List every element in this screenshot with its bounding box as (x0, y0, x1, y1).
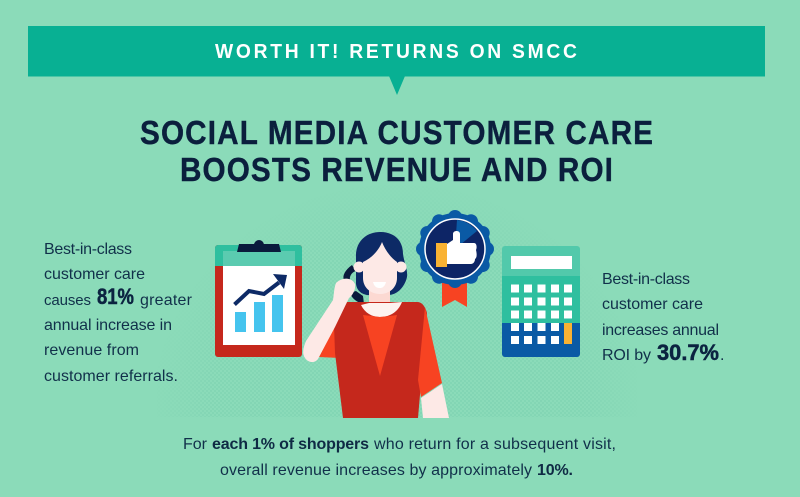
left text block: 81%: 81% (97, 284, 134, 309)
right text block: 30.7%: Best-in-class (602, 271, 690, 288)
bottom statement: who return for a subsequent visit, (373, 436, 616, 453)
right sleeve (418, 307, 442, 397)
face (363, 242, 397, 294)
display (511, 256, 572, 269)
left text block: 81%: Best-in-class (44, 241, 132, 258)
scalloped seal (416, 210, 494, 288)
right text block: 30.7% (602, 271, 724, 365)
collar (361, 302, 402, 317)
neck (369, 288, 390, 314)
trend arrow (234, 274, 287, 304)
left text block: 81%: causes (44, 292, 91, 309)
bottom statement: overall revenue increases by approximately (220, 462, 532, 479)
left text block: 81%: customer care (44, 266, 145, 283)
cuff (436, 243, 447, 267)
icon: calculator (502, 246, 580, 357)
right forearm (421, 384, 449, 418)
smile (373, 282, 386, 288)
bottom statement (183, 436, 616, 479)
ribbon (442, 280, 467, 307)
bottom statement: For (183, 436, 208, 453)
thumb (447, 231, 477, 264)
bottom statement: each 1% of shoppers (212, 436, 369, 453)
phone handset (343, 265, 364, 304)
bars (235, 295, 283, 332)
banner heading: WORTH IT! RETURNS ON SMCC (215, 40, 577, 63)
V-neck panel (363, 315, 397, 376)
keypad (511, 284, 572, 344)
left text block: 81%: customer referrals. (44, 368, 178, 385)
right text block: 30.7%: ROI by (602, 347, 651, 364)
right text block: 30.7%: customer care (602, 296, 703, 313)
torso (334, 302, 427, 418)
stippled ground texture (202, 232, 592, 417)
raised arm and hand (303, 279, 355, 362)
left sleeve (319, 322, 340, 358)
icon: thumbs-up award badge (416, 210, 494, 307)
title (140, 115, 653, 188)
title: BOOSTS REVENUE AND ROI (180, 152, 613, 188)
icon: clipboard with growth chart (215, 240, 302, 357)
left text block: 81% (44, 241, 193, 385)
right text block: 30.7%: 30.7% (657, 340, 719, 365)
left text block: 81%: annual increase in (44, 317, 172, 334)
title: SOCIAL MEDIA CUSTOMER CARE (140, 115, 653, 151)
left text block: 81%: greater (140, 292, 193, 309)
hair (356, 232, 407, 295)
right text block: 30.7%: . (720, 347, 724, 364)
left text block: 81%: revenue from (44, 342, 139, 359)
bottom statement: 10%. (537, 462, 573, 479)
ears (354, 262, 364, 272)
banner with pointer (28, 26, 765, 95)
right text block: 30.7%: increases annual (602, 322, 719, 339)
woman on the phone (303, 232, 449, 418)
